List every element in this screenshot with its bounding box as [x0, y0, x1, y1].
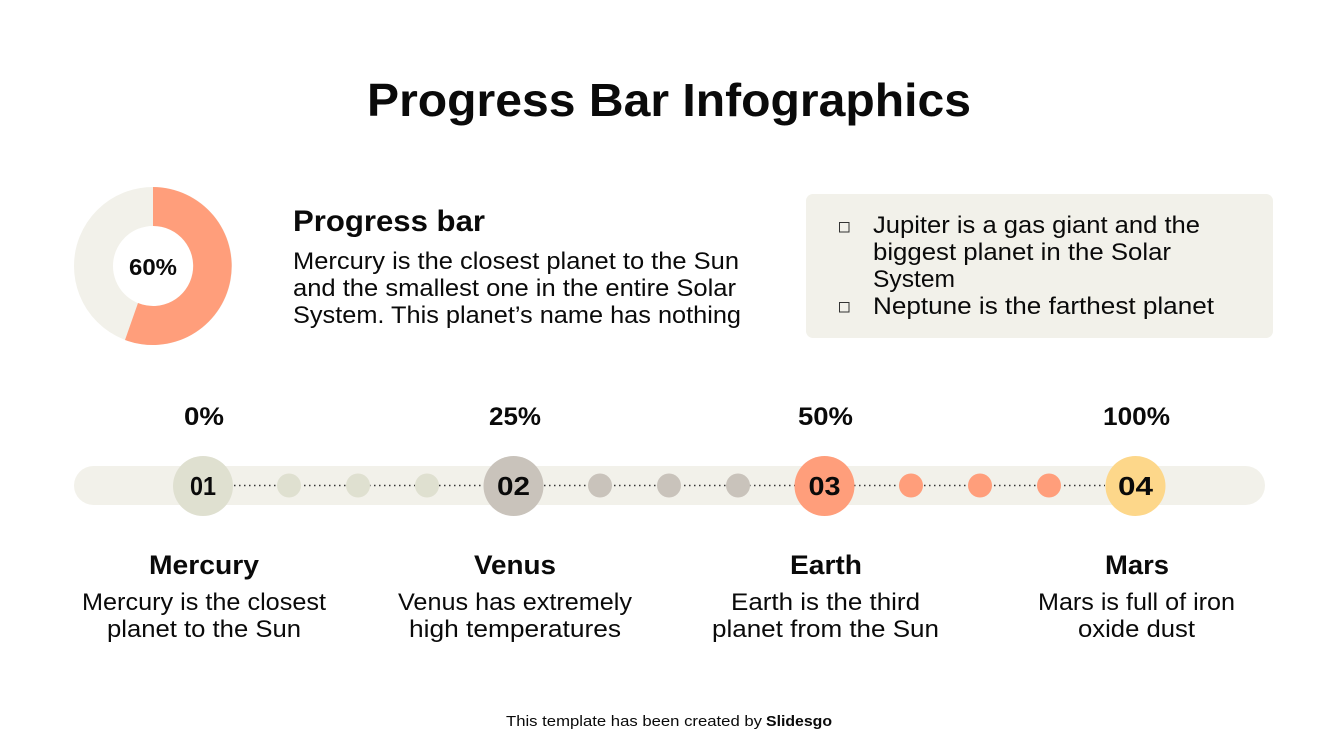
- dotted connector: [234, 484, 1105, 486]
- text block: Venus: Venus has extremely: [398, 589, 632, 616]
- milestone 04: 04: [1118, 471, 1154, 501]
- text block: Mercury: Mercury is the closest: [82, 589, 326, 616]
- text block: Mars: Mars is full of iron: [1038, 589, 1235, 616]
- text block: progress bar: [293, 205, 741, 329]
- text block: Venus: [398, 550, 632, 643]
- percentage labels: 100%: [1103, 403, 1170, 431]
- text block: progress bar: Progress bar: [293, 205, 485, 238]
- text block: Venus: Venus: [474, 550, 556, 580]
- text block: Earth: planet from the Sun: [712, 616, 939, 643]
- milestone 03: 03: [808, 471, 840, 501]
- panel: bullet list: Jupiter is a gas giant and the: [873, 212, 1200, 239]
- panel: bullet list: System: [873, 266, 955, 293]
- percentage labels: 25%: [489, 403, 541, 431]
- text block: Mars: [1038, 550, 1235, 643]
- panel: bullet list: Neptune is the farthest planet: [873, 293, 1214, 320]
- footer credit: Slidesgo: [766, 713, 832, 730]
- text block: progress bar: Mercury is the closest planet to the Sun: [293, 248, 739, 275]
- text block: progress bar: and the smallest one in the entire Solar: [293, 275, 736, 302]
- text block: Mercury: planet to the Sun: [107, 616, 301, 643]
- text block: progress bar: System. This planet’s name has nothing: [293, 302, 741, 329]
- percentage labels: [184, 403, 1170, 431]
- progress track: [74, 466, 1265, 505]
- footer credit: This template has been created by: [506, 713, 763, 730]
- text block: Earth: [712, 550, 939, 643]
- donut chart: 60%: [94, 187, 232, 345]
- percentage labels: 0%: [184, 403, 224, 431]
- text block: Earth: Earth: [790, 550, 862, 580]
- panel: bullet list: [806, 194, 1273, 338]
- milestone 03: [794, 456, 854, 516]
- text block: Mars: Mars: [1105, 550, 1169, 580]
- milestone 04: [1106, 456, 1166, 516]
- title: Progress Bar Infographics: [367, 74, 971, 126]
- milestone 01: 01: [190, 471, 216, 501]
- step markers: [277, 474, 1061, 498]
- text block: Earth: Earth is the third: [731, 589, 920, 616]
- percentage labels: 50%: [798, 403, 853, 431]
- milestone 01: [173, 456, 233, 516]
- milestone 02: 02: [497, 471, 530, 501]
- text block: Venus: high temperatures: [409, 616, 621, 643]
- donut chart: 60%: 60%: [129, 254, 177, 280]
- text block: Mercury: Mercury: [149, 550, 259, 580]
- milestone 02: [484, 456, 544, 516]
- text block: Mercury: [82, 550, 326, 643]
- panel: bullet list: biggest planet in the Solar: [873, 239, 1171, 266]
- text block: Mars: oxide dust: [1078, 616, 1195, 643]
